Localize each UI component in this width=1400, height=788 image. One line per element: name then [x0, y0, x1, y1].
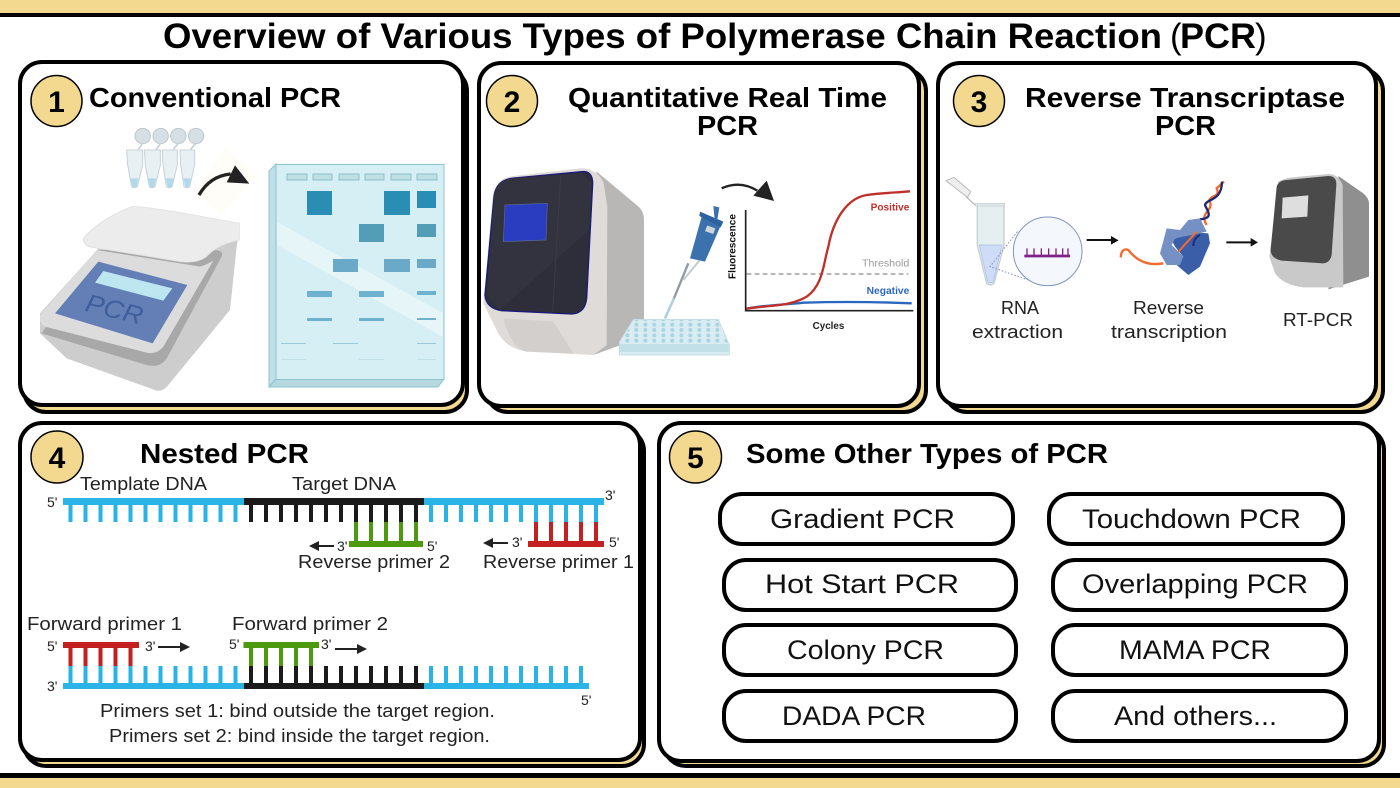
label: reverse transcription — [1111, 298, 1227, 342]
number badge 5: 5 — [687, 442, 704, 475]
label: RNA extraction: RNA — [1001, 298, 1039, 318]
icon: thermocycler: PCR — [83, 289, 146, 331]
DNA labels: Reverse primer 1 — [483, 552, 634, 572]
DNA labels — [27, 474, 634, 634]
primer set captions: Primers set 1: bind outside the target region. — [100, 701, 495, 721]
strand end labels: 3' — [321, 636, 331, 652]
arrow: extraction to transcription — [1087, 236, 1119, 245]
strand end labels: 5' — [47, 638, 57, 654]
pill: MAMA PCR — [1053, 625, 1346, 675]
forward primer 1 — [63, 642, 139, 666]
heading: quantitative real time PCR — [568, 82, 887, 141]
heading: reverse transcriptase PCR: Reverse Transcriptase — [1025, 82, 1345, 113]
number badge 5 — [670, 431, 722, 483]
strand end labels: 3' — [605, 487, 615, 503]
pill: touchdown PCR: Touchdown PCR — [1082, 504, 1301, 534]
pill: and others — [1053, 691, 1346, 741]
strand end labels: 3' — [145, 638, 155, 654]
panel 3: reverse transcriptase PCR — [938, 63, 1383, 412]
bottom band — [0, 773, 1400, 788]
top DNA strand — [63, 498, 604, 522]
pill: gradient PCR: Gradient PCR — [770, 504, 955, 534]
pill: DADA PCR: DADA PCR — [782, 701, 926, 731]
title: ( — [1170, 17, 1182, 56]
amplification chart: Negative — [867, 286, 910, 297]
heading: reverse transcriptase PCR — [1025, 82, 1345, 141]
strand end labels — [47, 487, 619, 708]
number badge 3 — [954, 76, 1004, 126]
icon: thermocycler — [40, 207, 239, 391]
panel 2: quantitative real time PCR — [479, 63, 926, 412]
arrow: transcription to RT-PCR — [1226, 238, 1258, 247]
number badge 4 — [31, 431, 83, 483]
DNA labels: Forward primer 2 — [232, 614, 388, 634]
amplification chart: Positive — [871, 203, 910, 214]
DNA labels: Reverse primer 2 — [298, 552, 450, 572]
strand end labels: 5' — [609, 534, 619, 550]
amplification chart: Cycles — [813, 321, 845, 332]
primer set captions — [100, 701, 495, 746]
icon: PCR tubes — [127, 128, 257, 215]
amplification chart: Threshold — [862, 259, 909, 270]
top band — [0, 0, 1400, 17]
label: RNA extraction: extraction — [972, 322, 1063, 342]
pill: and others: And others... — [1114, 701, 1277, 731]
arrow: tubes to gel — [199, 165, 249, 195]
label: reverse transcription: transcription — [1111, 322, 1227, 342]
number badge 2: 2 — [504, 86, 520, 119]
pill: hot start PCR: Hot Start PCR — [765, 569, 959, 599]
pill: colony PCR — [724, 625, 1016, 675]
icon: reverse transcriptase enzyme — [1121, 182, 1224, 275]
heading: conventional PCR: Conventional PCR — [89, 82, 341, 113]
pill: hot start PCR — [724, 560, 1016, 610]
panel 1: conventional PCR — [20, 62, 467, 412]
DNA labels: Template DNA — [80, 474, 207, 494]
number badge 1: 1 — [48, 86, 65, 119]
icon: RNA extraction tube with magnifier — [946, 177, 1082, 286]
heading: nested PCR: Nested PCR — [140, 438, 309, 469]
number badge 4: 4 — [49, 442, 66, 475]
pill: DADA PCR — [724, 691, 1016, 741]
strand end labels: 3' — [337, 538, 347, 554]
strand end labels: 5' — [427, 538, 437, 554]
heading: reverse transcriptase PCR: PCR — [1155, 110, 1216, 141]
label: RT-PCR: RT-PCR — [1283, 310, 1353, 330]
amplification chart — [728, 191, 913, 332]
reverse primer 2 — [349, 522, 423, 547]
arrow: machine to chart — [722, 181, 774, 201]
icon: pipette and well plate — [619, 206, 729, 355]
title: PCR — [1180, 17, 1256, 56]
bottom DNA strand — [63, 666, 589, 689]
strand end labels: 3' — [512, 534, 522, 550]
title: ) — [1255, 17, 1267, 56]
DNA labels: Target DNA — [292, 474, 396, 494]
label: RNA extraction — [972, 298, 1063, 342]
heading: quantitative real time PCR: PCR — [697, 110, 758, 141]
pill: MAMA PCR: MAMA PCR — [1119, 635, 1271, 665]
label: reverse transcription: Reverse — [1133, 298, 1204, 318]
primer set captions: Primers set 2: bind inside the target region. — [109, 726, 490, 746]
pill: touchdown PCR — [1049, 494, 1343, 544]
icon: qPCR machine — [483, 168, 644, 355]
strand end labels: 3' — [47, 678, 57, 694]
pill: colony PCR: Colony PCR — [787, 635, 944, 665]
pill: overlapping PCR: Overlapping PCR — [1082, 569, 1308, 599]
icon: electrophoresis gel — [269, 164, 444, 387]
icon: RT-PCR machine — [1269, 174, 1369, 289]
DNA labels: Forward primer 1 — [27, 614, 182, 634]
strand end labels: 5' — [229, 636, 239, 652]
forward primer 2 — [244, 642, 319, 666]
number badge 3: 3 — [971, 86, 987, 119]
number badge 2 — [486, 76, 538, 126]
number badge 1 — [31, 76, 82, 126]
amplification chart: Fluorescence — [728, 214, 739, 279]
pill: gradient PCR — [720, 494, 1013, 544]
heading: quantitative real time PCR: Quantitative Real Time — [568, 82, 887, 113]
panel 5: other types of PCR — [659, 423, 1384, 766]
pill: overlapping PCR — [1053, 560, 1346, 610]
reverse primer 1 — [528, 522, 604, 547]
panel 4: nested PCR — [20, 423, 644, 766]
strand end labels: 5' — [47, 494, 57, 510]
title: Overview of Various Types of Polymerase Chain Reaction — [163, 17, 1162, 56]
arrows: primer directions — [158, 538, 508, 654]
heading: some other types of PCR: Some Other Types of PCR — [746, 438, 1108, 469]
strand end labels: 5' — [581, 692, 591, 708]
